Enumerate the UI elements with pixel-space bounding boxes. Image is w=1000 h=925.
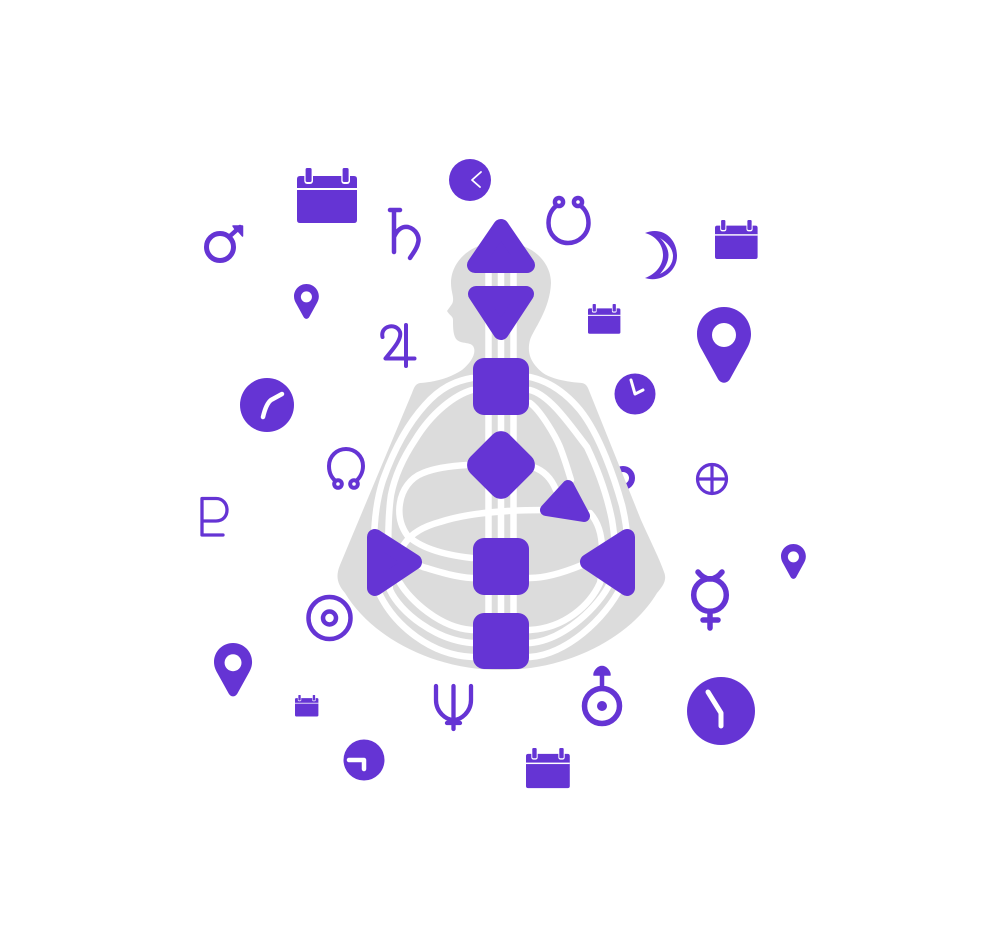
icon: clock bottom left (344, 740, 384, 780)
panel: purple centres (375, 227, 627, 669)
icon: clock right (614, 374, 656, 414)
centre: throat square (473, 358, 529, 415)
centre: head triangle (475, 227, 527, 265)
icon: Mars symbol (206, 226, 242, 260)
centre: sacral square (473, 538, 529, 595)
icon: Moon symbol (645, 231, 677, 279)
icon: calendar large (297, 167, 357, 223)
centre: root square (473, 613, 529, 669)
centre: G diamond (462, 426, 540, 504)
icon: Jupiter symbol (382, 325, 414, 366)
icon: clock top (449, 159, 491, 201)
icon: small pin right (781, 544, 806, 579)
panel: grey body silhouette with channels (338, 242, 665, 670)
icon: Earth symbol (698, 464, 726, 494)
icon: Neptune symbol (436, 686, 471, 729)
icon: Pluto symbol (202, 498, 227, 535)
icon: Uranus symbol (584, 666, 620, 724)
icon: small pin upper left (294, 284, 319, 319)
icon: calendar right (715, 219, 758, 259)
icon: Mercury symbol (694, 572, 726, 628)
centre: heart triangle (546, 486, 584, 516)
icon: calendar tiny (295, 695, 318, 716)
icon: calendar bottom (526, 747, 570, 788)
centre: solar plexus triangle (588, 537, 627, 588)
white channels (374, 270, 627, 657)
icon: target symbol (308, 597, 350, 639)
icon: large pin (697, 307, 751, 383)
icon: clock large bottom right (687, 677, 755, 745)
centre: ajna triangle (476, 294, 526, 332)
icon: node ring left (329, 449, 363, 490)
icon: clock left (240, 378, 294, 432)
icon: medium pin lower left (214, 643, 252, 696)
icon: calendar small upper (588, 303, 620, 334)
icon: Saturn symbol (390, 210, 419, 258)
icon: partly hidden circle behind body (614, 469, 632, 487)
icon: node ring top (548, 196, 588, 243)
centre: spleen triangle (375, 537, 414, 588)
body silhouette (338, 242, 665, 670)
